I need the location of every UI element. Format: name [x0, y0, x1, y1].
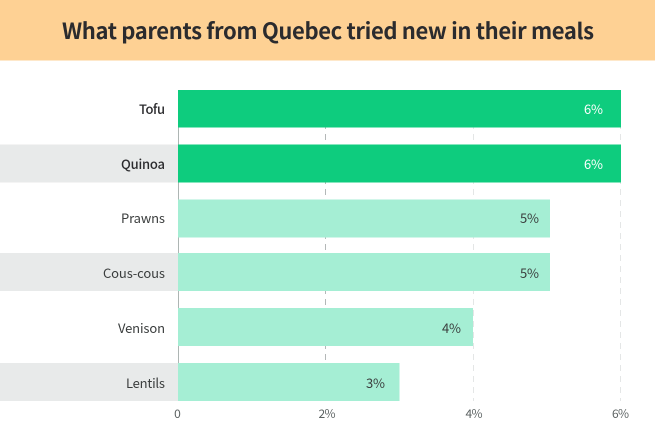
- x axis labels: 2%: [318, 405, 336, 422]
- x axis labels: 0: [174, 405, 181, 422]
- category labels: Lentils: [126, 373, 165, 392]
- bar: Tofu: 6%: [584, 99, 603, 118]
- bar: Quinoa: [178, 144, 621, 182]
- bar: Prawns: [178, 200, 550, 238]
- bar chart: [178, 90, 621, 401]
- bar: Tofu: [178, 90, 621, 128]
- bar: Venison: 4%: [442, 318, 461, 337]
- x axis labels: [174, 405, 629, 422]
- bar: Prawns: 5%: [520, 208, 539, 227]
- alternating row bands: [0, 144, 178, 401]
- category labels: Prawns: [121, 208, 165, 227]
- x axis labels: 4%: [466, 405, 482, 422]
- bar: Venison: [178, 308, 473, 346]
- category labels: Venison: [118, 318, 165, 337]
- x axis labels: 6%: [612, 405, 629, 422]
- bar: Cous-cous: 5%: [520, 263, 539, 282]
- title: What parents from Quebec tried new in their meals: [62, 14, 594, 46]
- category labels: Quinoa: [121, 154, 165, 173]
- bar: Cous-cous: [178, 253, 550, 291]
- bar: Lentils: [178, 363, 400, 401]
- y axis line: [178, 90, 180, 401]
- category labels: Cous-cous: [103, 263, 165, 282]
- category labels: [103, 99, 165, 392]
- gridlines: [326, 90, 620, 401]
- category labels: Tofu: [139, 99, 165, 118]
- header banner: [0, 0, 655, 60]
- bar: Quinoa: 6%: [584, 154, 603, 173]
- bar: Lentils: 3%: [366, 373, 385, 392]
